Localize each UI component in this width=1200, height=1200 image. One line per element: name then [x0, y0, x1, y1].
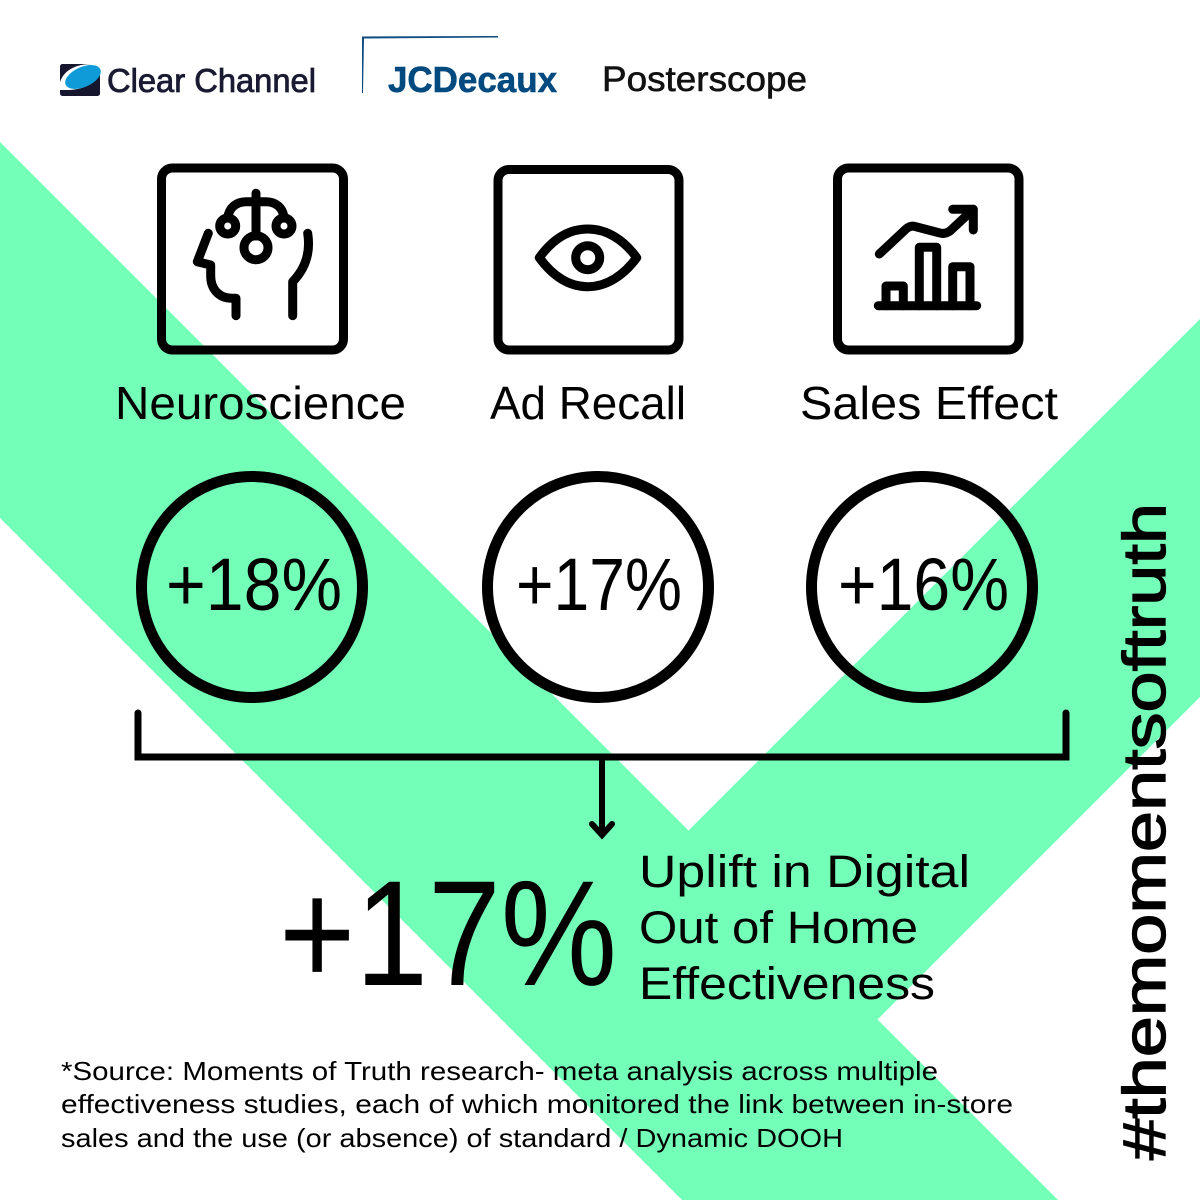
- icon: neuroscience head: [162, 168, 344, 350]
- text: source note: effectiveness studies, each of which monitored the link between in-store: [61, 1089, 1013, 1119]
- stat circle: +18%: +18%: [166, 543, 342, 626]
- bracket: [138, 713, 1066, 757]
- logo: Posterscope: Posterscope: [602, 60, 807, 99]
- text: source note: sales and the use (or absence) of standard / Dynamic DOOH: [61, 1123, 843, 1153]
- stat circle: +17%: [488, 476, 708, 698]
- text: uplift description: [639, 846, 970, 1009]
- text: source note: [61, 1056, 1013, 1153]
- label: Neuroscience: Neuroscience: [115, 377, 406, 429]
- arrow: [592, 757, 612, 835]
- headline stat: +17%: +17%: [279, 849, 617, 1017]
- label: Sales Effect: Sales Effect: [800, 377, 1058, 429]
- stat circle: +18%: [142, 476, 362, 698]
- icon: sales chart: [838, 168, 1019, 350]
- label: Ad Recall: Ad Recall: [490, 377, 686, 429]
- logo: JCDecaux: [362, 36, 557, 100]
- stat circle: +16%: +16%: [838, 543, 1009, 626]
- vertical hashtag: #themomentsoftruth: [1111, 503, 1178, 1160]
- logo: Clear Channel: Clear Channel: [107, 62, 316, 99]
- stat circle: +17%: +17%: [516, 543, 682, 626]
- icon: eye: [498, 170, 679, 350]
- text: source note: *Source: Moments of Truth research- meta analysis across multiple: [61, 1056, 938, 1086]
- text: uplift description: Out of Home: [639, 902, 918, 953]
- text: uplift description: Uplift in Digital: [639, 846, 970, 897]
- stat circle: +16%: [812, 476, 1032, 698]
- text: uplift description: Effectiveness: [639, 958, 935, 1009]
- logo: JCDecaux: JCDecaux: [388, 59, 557, 100]
